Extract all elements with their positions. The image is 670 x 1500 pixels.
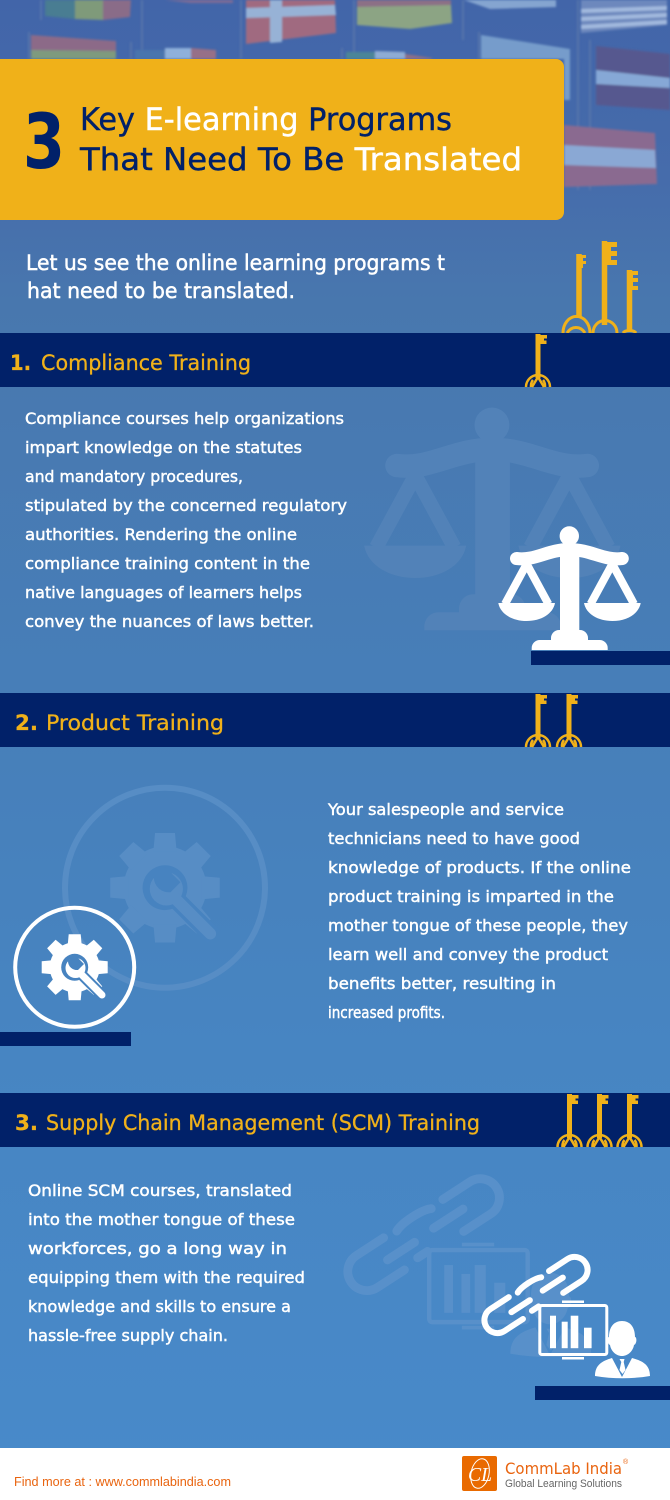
section 1 body text: impart knowledge on the statutes [25,438,302,457]
heading: Supply Chain Management (SCM) Training: Supply Chain Management (SCM) Training [46,1111,480,1135]
footer [0,1448,670,1500]
icon: faded scales of justice [364,408,620,630]
section 3 body text: into the mother tongue of these [28,1210,295,1229]
section 2 body text: increased profits. [328,1003,445,1022]
icon: faded chain, chart board and person [339,1170,591,1357]
section 2 body text: benefits better, resulting in [328,974,556,993]
heading number 1: 1. [10,351,31,375]
icon: chain, chart board and person [479,1251,650,1378]
registered mark: ® [623,1458,629,1466]
section 1 body text: compliance training content in the [25,554,310,573]
flags backdrop [29,0,670,190]
section 1 body text: Compliance courses help organizations [25,409,344,428]
section 2 header [0,693,670,747]
section 3 body text: knowledge and skills to ensure a [28,1297,291,1316]
icon: three keys [563,241,638,333]
section 2 accent bar [0,1032,131,1046]
section 1 body text: native languages of learners helps [25,583,302,602]
section 1 body text: authorities. Rendering the online [25,525,297,544]
section 2 body text [327,800,631,1022]
section 2 body text: Your salespeople and service [327,800,564,819]
section 1 body text: stipulated by the concerned regulatory [25,496,347,515]
section 2 body text: knowledge of products. If the online [328,858,631,877]
icon: three keys [558,1094,642,1147]
logo tagline: Global Learning Solutions [505,1478,622,1490]
section 3 body text: equipping them with the required [28,1268,305,1287]
title numeral 3: 3 [23,97,65,186]
section 1 body text [25,409,347,631]
icon: gear and wrench [15,908,134,1027]
heading number 2: 2. [15,711,38,735]
section 1 accent bar [531,651,670,665]
icon: faded gear and wrench [65,788,265,988]
footer link text: Find more at : www.commlabindia.com [14,1474,231,1489]
heading number 3: 3. [15,1111,38,1135]
intro text: hat need to be translated. [27,279,295,303]
section 1 header [0,333,670,387]
section 1 body text: convey the nuances of laws better. [25,612,314,631]
title line 1: Key E-learning Programs [80,102,452,138]
logo mark [462,1456,497,1491]
section 3 body text: Online SCM courses, translated [28,1181,292,1200]
icon: two keys [526,694,581,747]
section 2 body text: technicians need to have good [328,829,580,848]
section 3 header [0,1093,670,1147]
section 1 body text: and mandatory procedures, [25,467,243,486]
logo wordmark: CommLab India [505,1459,622,1478]
icon: scales of justice [498,526,641,650]
section 2 body text: mother tongue of these people, they [328,916,628,935]
icon: key [526,334,550,387]
section 3 accent bar [535,1386,670,1400]
heading: Product Training: Product Training [46,711,224,735]
heading: Compliance Training: Compliance Training [41,351,251,375]
intro text: Let us see the online learning programs t [26,251,445,275]
title banner [0,59,564,220]
logo mark: CL [468,1464,492,1486]
intro text [26,251,445,303]
section 2 body text: learn well and convey the product [328,945,608,964]
section 3 body text: workforces, go a long way in [28,1239,287,1258]
section 3 body text: hassle-free supply chain. [28,1326,228,1345]
section 3 body text [28,1181,305,1345]
section 2 body text: product training is imparted in the [328,887,614,906]
title line 2: That Need To Be Translated [79,142,522,178]
